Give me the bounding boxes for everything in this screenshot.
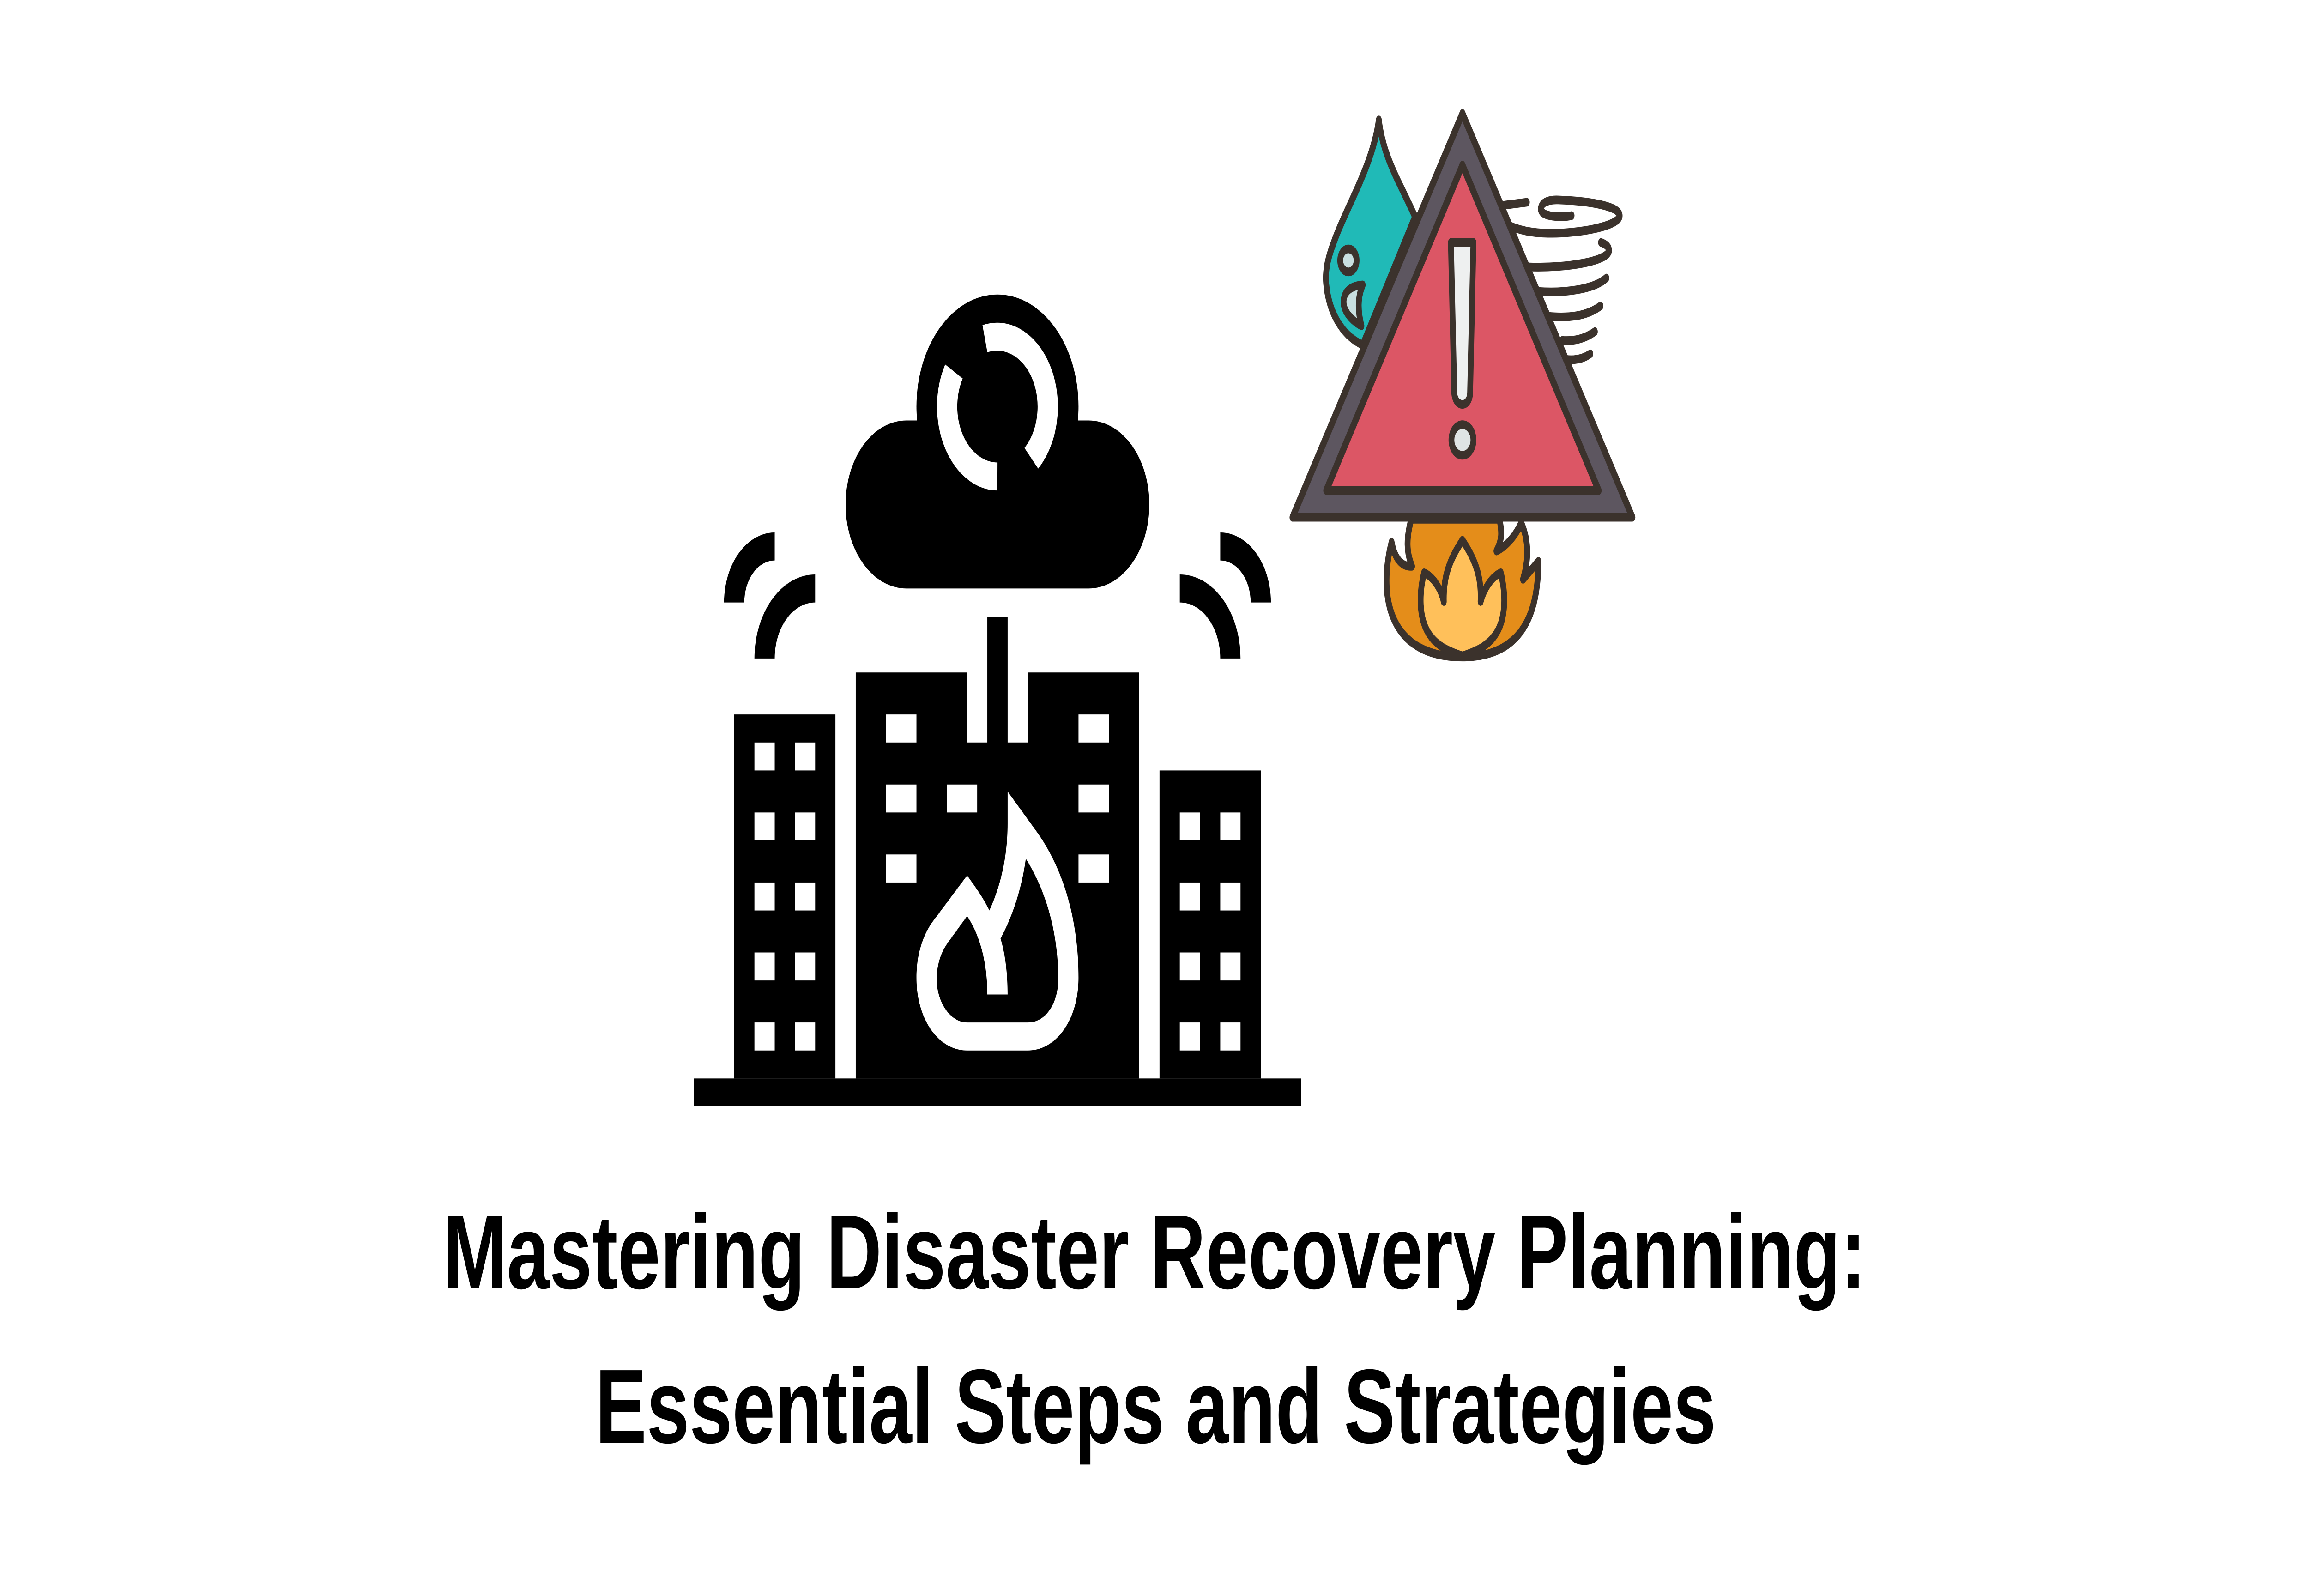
icon: left signal arcs: [734, 546, 815, 659]
warning triangle: [1293, 114, 1632, 517]
icon: flame on central building: [917, 792, 1078, 1051]
left building: [734, 714, 835, 1078]
icon: cloud with ring: [846, 295, 1149, 588]
title: [443, 1194, 1866, 1465]
ground line: [694, 1078, 1301, 1106]
icon: right signal arcs: [1180, 546, 1261, 659]
icon: burning city under a storm cloud: [694, 295, 1301, 1106]
icon: natural hazards warning sign: [1293, 114, 1632, 657]
icon: water drop: [1326, 120, 1415, 345]
title: Mastering Disaster Recovery Planning:: [443, 1194, 1866, 1311]
title: Essential Steps and Strategies: [595, 1348, 1716, 1465]
central building with antenna: [856, 617, 1139, 1078]
icon: tornado: [1503, 200, 1620, 360]
exclamation mark: [1451, 242, 1474, 455]
right building: [1160, 770, 1261, 1078]
icon: fire: [1386, 519, 1538, 657]
